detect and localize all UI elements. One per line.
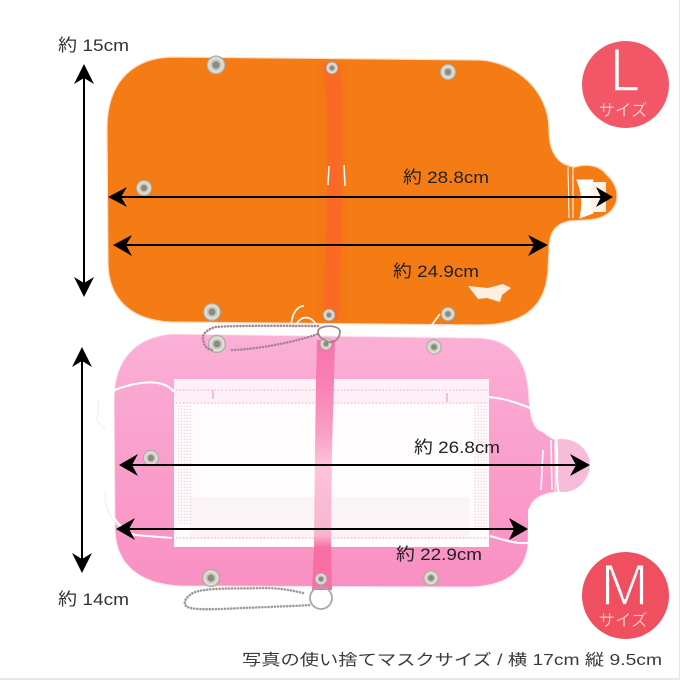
caption: 写真の使い捨てマスクサイズ / 横 17cm 縦 9.5cm (242, 651, 662, 669)
tab glare (568, 167, 593, 218)
arrow: L body width (113, 235, 548, 256)
badge: M size (582, 552, 669, 639)
mask ear loops (97, 382, 563, 545)
white mask (174, 379, 489, 547)
snap buttons (136, 56, 456, 321)
arrow: M body width (116, 518, 528, 540)
centre strap (316, 62, 347, 322)
pink M size case (97, 334, 590, 590)
ball chain lower (185, 588, 310, 609)
badge: M size: M (600, 553, 649, 618)
ball chain upper (203, 326, 318, 350)
arrow: L total width (108, 187, 613, 207)
badge: L size: サイズ (598, 101, 648, 120)
arrow: M total width (119, 454, 590, 476)
label: M height: 約 14cm (58, 590, 129, 609)
ring upper (318, 326, 340, 342)
label: M body width: 約 22.9cm (396, 545, 482, 564)
badge: L size: L (610, 36, 640, 104)
white arcs near ring (291, 306, 440, 326)
label: L body width: 約 24.9cm (393, 262, 479, 281)
label: M total width: 約 26.8cm (414, 438, 500, 457)
centre strap (312, 340, 335, 590)
badge: L size (582, 36, 669, 128)
surface glare (468, 284, 511, 302)
badge: M size: サイズ (598, 611, 648, 630)
orange L size case (107, 56, 617, 326)
snap buttons (143, 335, 442, 587)
ring lower (310, 587, 332, 609)
arrow: M height (72, 347, 92, 573)
label: L height: 約 15cm (58, 36, 129, 55)
arrow: L height (74, 64, 94, 297)
label: L total width: 約 28.8cm (403, 168, 489, 187)
